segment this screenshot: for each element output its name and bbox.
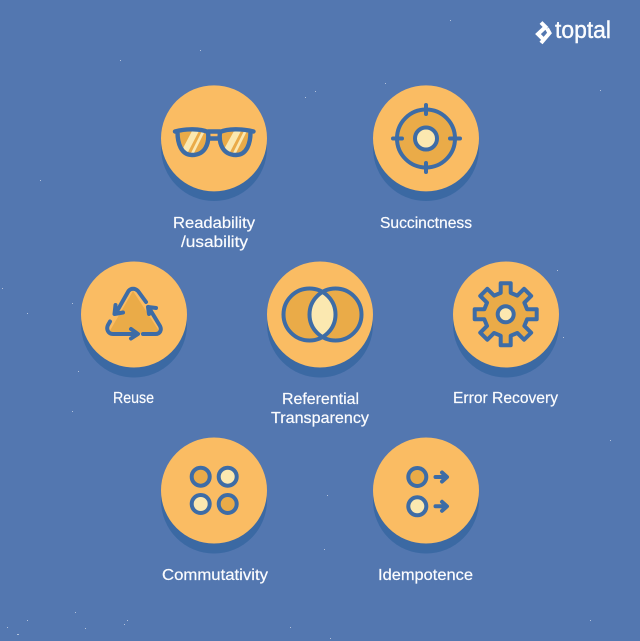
icon: dots with arrows — [408, 468, 447, 515]
icon: recycle arrows — [107, 289, 161, 338]
item: Idempotence — [373, 438, 479, 584]
icon: venn diagram — [284, 288, 362, 340]
icon: toptal mark — [538, 22, 550, 43]
badge — [373, 438, 479, 554]
label: Readability — [173, 215, 255, 232]
badge — [267, 262, 373, 378]
icon: four dots — [192, 468, 237, 513]
item: Error Recovery — [453, 262, 559, 407]
label: Reuse — [113, 390, 154, 407]
item: Commutativity — [161, 438, 268, 584]
badge — [373, 85, 479, 201]
logo wordmark: toptal — [555, 17, 611, 44]
badge — [161, 438, 267, 554]
label: Idempotence — [378, 567, 473, 584]
badge — [453, 262, 559, 378]
item: Reuse — [81, 262, 187, 407]
label: Commutativity — [162, 567, 268, 584]
label line 2: Transparency — [271, 410, 369, 427]
logo: toptal — [538, 17, 611, 44]
icon: gear — [475, 283, 537, 345]
item: Succinctness — [373, 85, 479, 232]
label: Succinctness — [380, 215, 472, 232]
item: Referential Transparency — [267, 262, 373, 427]
label: Referential — [282, 391, 359, 408]
icon: target — [393, 105, 460, 172]
icon: sunglasses — [175, 129, 254, 155]
badge — [81, 262, 187, 378]
label: Error Recovery — [453, 390, 558, 407]
badge — [161, 85, 267, 201]
item: Readability /usability — [161, 85, 267, 251]
label line 2: /usability — [181, 234, 248, 251]
